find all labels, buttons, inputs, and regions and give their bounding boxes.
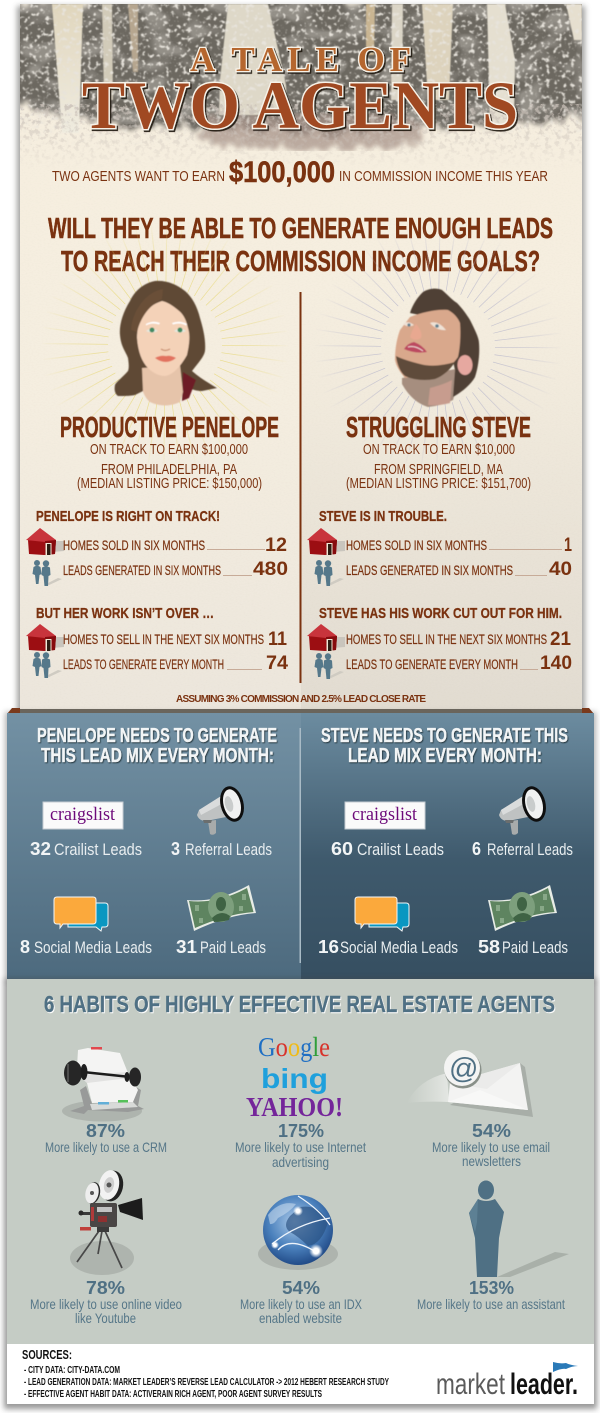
habit: online video: like Youtube bbox=[75, 1310, 136, 1326]
portrait: Steve bbox=[395, 289, 479, 407]
stats: Penelope remaining work: LEADS TO GENERATE EVERY MONTH bbox=[63, 657, 224, 672]
habit: online video bbox=[30, 1168, 182, 1326]
forest illustration bbox=[20, 4, 582, 156]
icon: search engine logos: bing bbox=[261, 1063, 328, 1094]
agent details: Steve: ON TRACK TO EARN $10,000 bbox=[363, 442, 515, 458]
habit: CRM bbox=[45, 1047, 167, 1155]
habit: assistant: 153% bbox=[469, 1278, 514, 1298]
habit: CRM: More likely to use a CRM bbox=[45, 1139, 167, 1155]
Penelope: paid leads bbox=[176, 885, 266, 957]
heading: Penelope lead mix: THIS LEAD MIX EVERY MONTH: bbox=[41, 745, 274, 767]
habit: online video: 78% bbox=[86, 1278, 125, 1298]
habit: assistant bbox=[417, 1180, 569, 1312]
Steve: referral leads: 6 bbox=[472, 839, 481, 859]
Steve: paid leads bbox=[478, 885, 568, 957]
icon: rolodex bbox=[62, 1047, 144, 1122]
Steve: social media leads: Social Media Leads bbox=[340, 938, 458, 957]
sources list: - EFFECTIVE AGENT HABIT DATA: ACTIVERAIN RICH AGENT, POOR AGENT SURVEY RESULTS bbox=[24, 1389, 322, 1400]
habit: email newsletters: newsletters bbox=[462, 1153, 521, 1169]
Penelope: referral leads: 3 bbox=[171, 839, 180, 859]
sunburst: Steve bbox=[348, 257, 528, 437]
Steve: referral leads bbox=[472, 784, 573, 859]
Steve: referral leads: Referral Leads bbox=[487, 840, 573, 859]
Steve: paid leads: 58 bbox=[478, 937, 500, 957]
agent details: Steve: FROM SPRINGFIELD, MA bbox=[374, 462, 503, 478]
Penelope: referral leads bbox=[171, 784, 272, 859]
stats: Penelope on track: LEADS GENERATED IN SIX MONTHS bbox=[63, 563, 221, 578]
stats: Penelope on track bbox=[26, 508, 288, 586]
icon: envelope bbox=[407, 1050, 533, 1117]
panel: footer sources and logo bbox=[7, 1344, 594, 1404]
heading: Steve lead mix: LEAD MIX EVERY MONTH: bbox=[348, 745, 542, 767]
stats: Penelope on track: 480 bbox=[253, 559, 288, 580]
stats: Penelope on track: 12 bbox=[265, 535, 287, 556]
intro line: TWO AGENTS WANT TO EARN bbox=[52, 168, 225, 185]
Steve: craigslist leads bbox=[331, 802, 444, 859]
habit: CRM: 87% bbox=[86, 1121, 125, 1141]
Steve: social media leads: 16 bbox=[318, 937, 339, 957]
agent details: Penelope: (MEDIAN LISTING PRICE: $150,000) bbox=[77, 476, 262, 492]
icon: envelope: @ bbox=[449, 1053, 478, 1085]
Penelope: paid leads: Paid Leads bbox=[200, 938, 266, 957]
Steve: social media leads bbox=[318, 897, 458, 957]
panel: paper header and agent comparison bbox=[10, 0, 590, 714]
stats: Steve in trouble: HOMES SOLD IN SIX MONTHS bbox=[346, 538, 487, 553]
center divider bbox=[300, 292, 302, 683]
icon: standing person bbox=[469, 1180, 569, 1277]
icon: search engine logos: YAHOO! bbox=[246, 1092, 343, 1122]
agent details: Steve bbox=[346, 442, 531, 492]
stats: Steve in trouble: 1 bbox=[564, 535, 572, 556]
stats: Penelope remaining work bbox=[26, 605, 288, 678]
Steve: paid leads: Paid Leads bbox=[502, 938, 568, 957]
stats: Steve remaining work: LEADS TO GENERATE EVERY MONTH bbox=[346, 657, 518, 672]
stats: Steve in trouble bbox=[307, 508, 572, 586]
stats: Penelope on track: HOMES SOLD IN SIX MONTHS bbox=[63, 538, 205, 553]
heading: Penelope lead mix bbox=[37, 725, 277, 767]
stats: Steve remaining work: 21 bbox=[550, 629, 571, 650]
stats: Penelope remaining work: 74 bbox=[266, 653, 288, 674]
habit: email newsletters: More likely to use email bbox=[432, 1139, 550, 1155]
habit: IDX website: enabled website bbox=[259, 1310, 342, 1326]
Steve: craigslist leads: craigslist bbox=[352, 804, 418, 825]
habit: email newsletters bbox=[407, 1050, 550, 1169]
stats: Steve in trouble: STEVE IS IN TROUBLE. bbox=[319, 508, 447, 525]
agent details: Steve: (MEDIAN LISTING PRICE: $151,700) bbox=[346, 476, 531, 492]
Penelope: referral leads: Referral Leads bbox=[185, 840, 272, 859]
icon: search engine logos bbox=[246, 1032, 343, 1122]
stats: Steve remaining work bbox=[307, 605, 572, 679]
habit: online video: More likely to use online video bbox=[30, 1296, 182, 1312]
sources list bbox=[22, 1347, 389, 1400]
habit: assistant: More likely to use an assistant bbox=[417, 1296, 565, 1312]
stats: Penelope on track: PENELOPE IS RIGHT ON TRACK! bbox=[36, 508, 220, 525]
Penelope: social media leads bbox=[20, 897, 152, 957]
intro line: IN COMMISSION INCOME THIS YEAR bbox=[339, 168, 548, 185]
habit: IDX website: 54% bbox=[282, 1278, 320, 1298]
stats: Penelope remaining work: HOMES TO SELL IN THE NEXT SIX MONTHS bbox=[63, 632, 264, 647]
sunburst: Penelope bbox=[75, 255, 255, 435]
icon: search engine logos: Google bbox=[258, 1032, 330, 1062]
panel: lead mix bbox=[5, 708, 596, 982]
habit: email newsletters: 54% bbox=[472, 1121, 511, 1141]
habit: internet advertising: 175% bbox=[278, 1121, 324, 1141]
logo: market leader: market bbox=[436, 1368, 505, 1401]
heading: Steve lead mix bbox=[321, 725, 568, 767]
sources list: SOURCES: bbox=[22, 1347, 72, 1362]
Penelope: social media leads: Social Media Leads bbox=[34, 938, 152, 957]
Steve: craigslist leads: Crailist Leads bbox=[357, 840, 444, 859]
habit: IDX website bbox=[240, 1195, 363, 1326]
agent details: Penelope: ON TRACK TO EARN $100,000 bbox=[90, 442, 248, 458]
panel: six habits bbox=[4, 979, 597, 1409]
stats: Steve remaining work: 140 bbox=[540, 653, 572, 674]
assumption note: ASSUMING 3% COMMISSION AND 2.5% LEAD CLOSE RATE bbox=[176, 694, 426, 705]
icon: globe bbox=[258, 1195, 338, 1270]
Penelope: craigslist leads bbox=[30, 802, 142, 859]
heading: Penelope lead mix: PENELOPE NEEDS TO GENERATE bbox=[37, 725, 277, 747]
Penelope: craigslist leads: 32 bbox=[30, 839, 51, 859]
habit: IDX website: More likely to use an IDX bbox=[240, 1296, 363, 1312]
intro line: $100,000 bbox=[229, 156, 335, 189]
title: Two Agents: TWO AGENTS bbox=[82, 67, 518, 143]
habit: internet advertising: advertising bbox=[272, 1154, 329, 1170]
stats: Steve in trouble: LEADS GENERATED IN SIX MONTHS bbox=[346, 563, 513, 578]
agent name: Penelope: PRODUCTIVE PENELOPE bbox=[60, 412, 279, 444]
Penelope: craigslist leads: Crailist Leads bbox=[54, 840, 142, 859]
main question heading bbox=[48, 213, 553, 278]
sources list: - CITY DATA: CITY-DATA.COM bbox=[24, 1365, 120, 1376]
portrait: Penelope bbox=[115, 281, 217, 406]
habit: internet advertising bbox=[235, 1032, 366, 1170]
Penelope: social media leads: 8 bbox=[20, 937, 30, 957]
stats: Penelope remaining work: BUT HER WORK ISN’T OVER … bbox=[36, 605, 214, 622]
agent details: Penelope bbox=[77, 442, 262, 492]
stats: Penelope remaining work: 11 bbox=[268, 629, 287, 650]
Steve: craigslist leads: 60 bbox=[331, 839, 353, 859]
stats: Steve in trouble: 40 bbox=[549, 559, 572, 580]
logo: market leader bbox=[436, 1362, 578, 1401]
icon: film camera bbox=[70, 1168, 143, 1275]
Penelope: paid leads: 31 bbox=[176, 937, 197, 957]
habit: internet advertising: More likely to use Internet bbox=[235, 1139, 366, 1155]
Penelope: craigslist leads: craigslist bbox=[50, 804, 116, 825]
agent details: Penelope: FROM PHILADELPHIA, PA bbox=[101, 462, 237, 478]
title: A Tale of: A TALE OF bbox=[190, 40, 411, 79]
intro line bbox=[52, 156, 548, 189]
sources list: - LEAD GENERATION DATA: MARKET LEADER’S REVERSE LEAD CALCULATOR -> 2012 HEBERT RESEARCH STUDY bbox=[24, 1377, 389, 1388]
